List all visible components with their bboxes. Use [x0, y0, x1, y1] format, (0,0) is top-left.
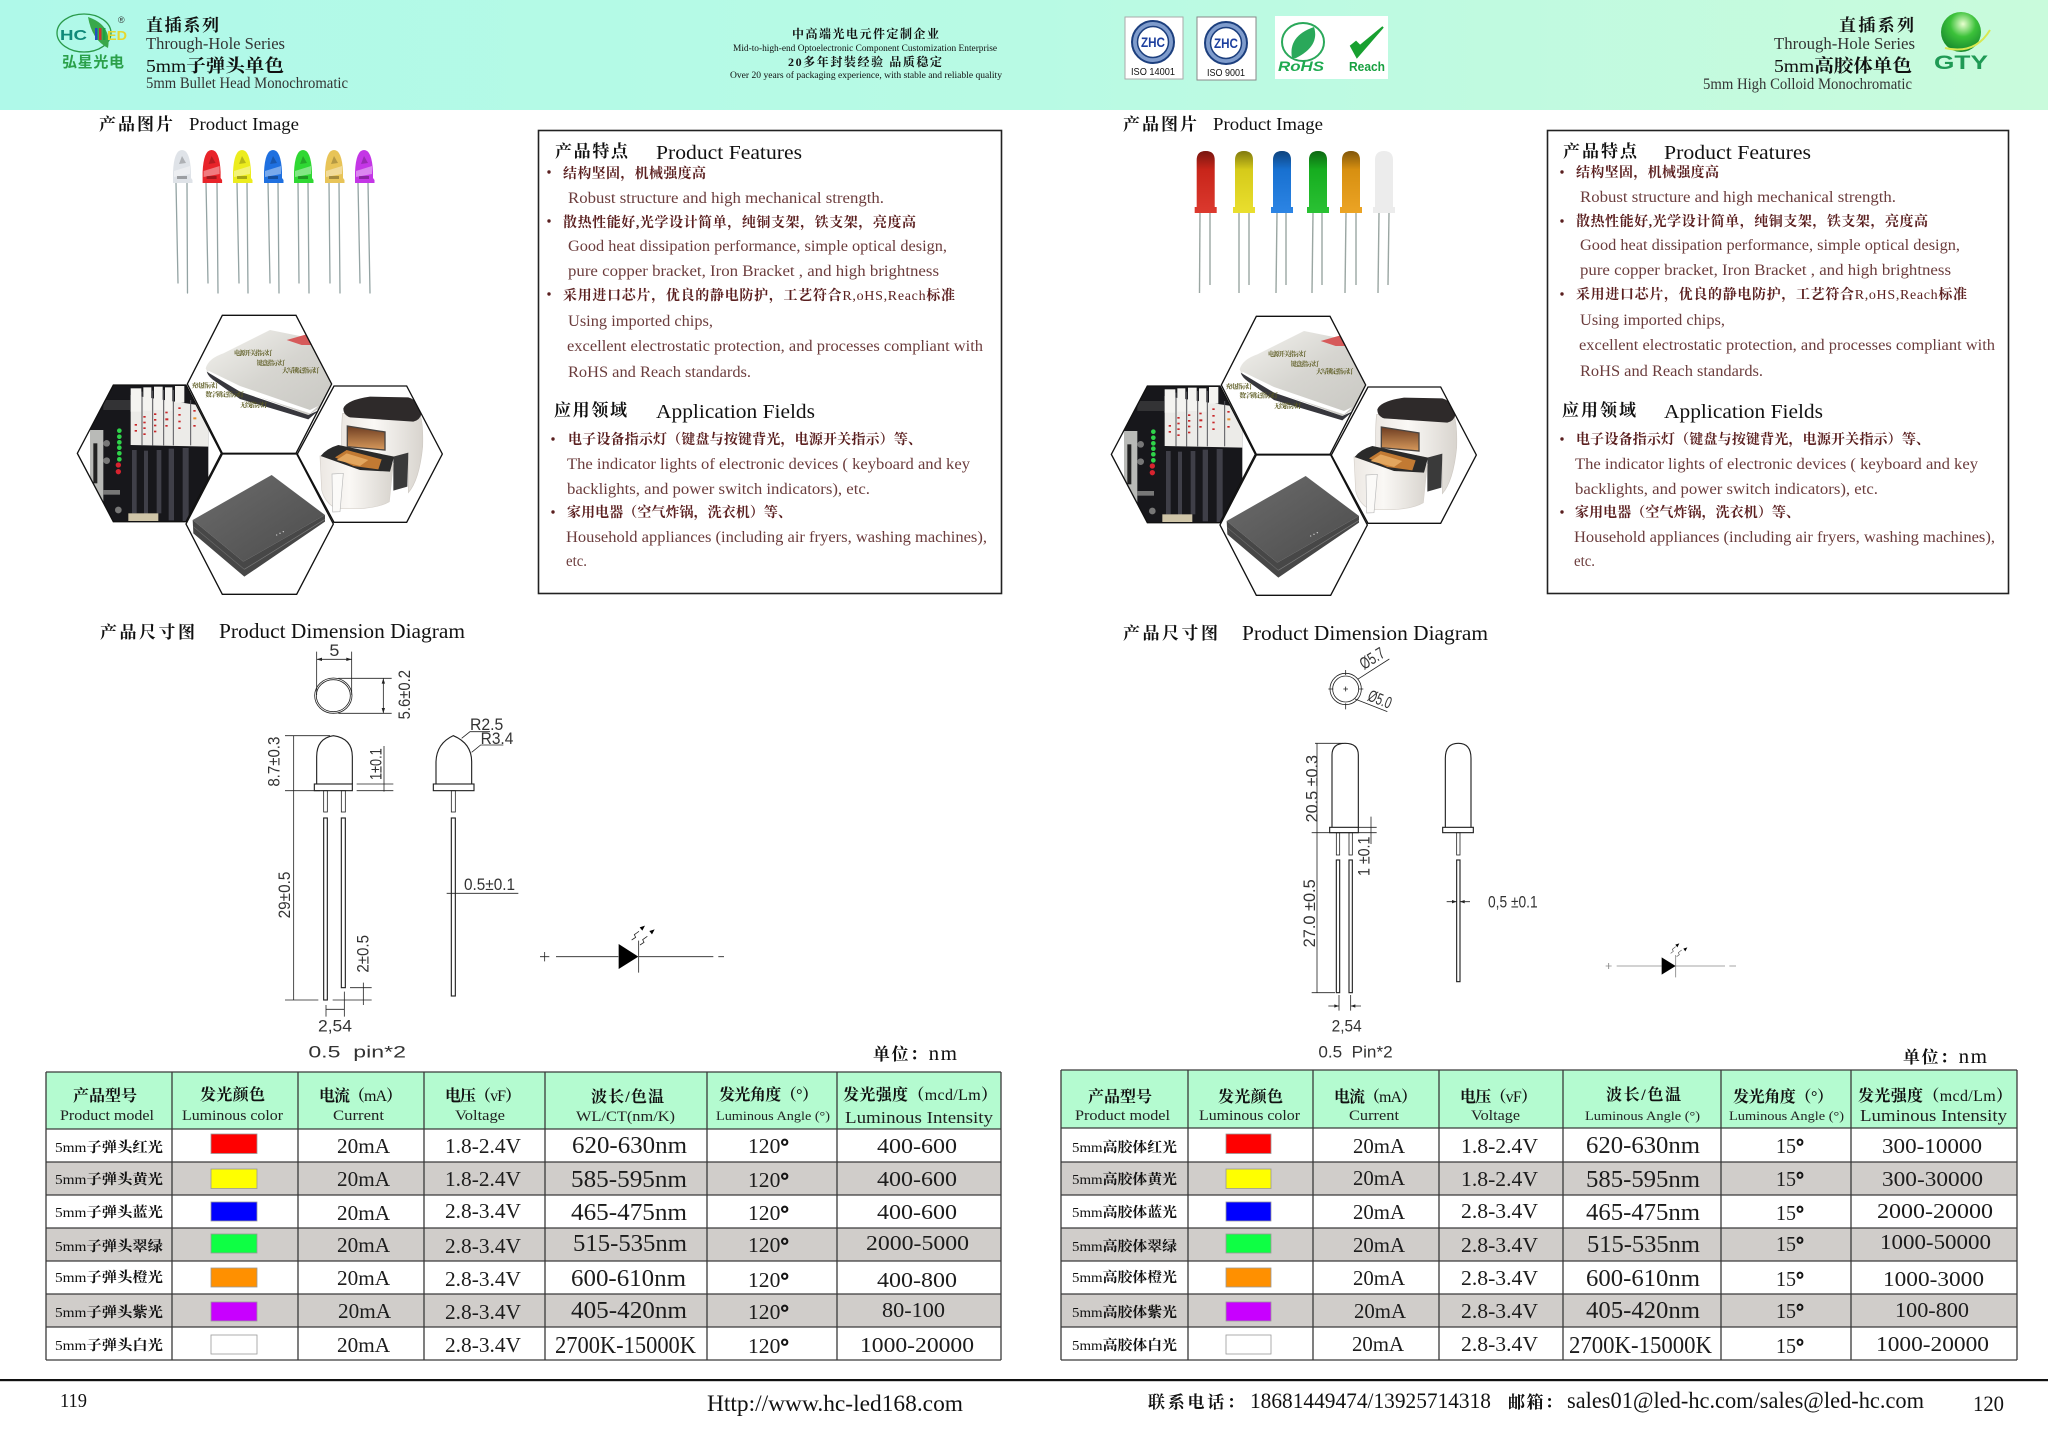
row: orange: 400-800	[877, 1268, 957, 1292]
application list	[1560, 431, 1995, 570]
row: red	[55, 1133, 957, 1159]
row: blue: 20mA	[1353, 1200, 1406, 1224]
row: red: 1.8-2.4V	[1461, 1134, 1538, 1158]
dimension drawing: left 5mm bullet LED: 8.7±0.3	[264, 737, 283, 787]
row: red: 15°	[1776, 1134, 1804, 1158]
row: yellow	[1072, 1166, 1983, 1193]
row: purple: 100-800	[1895, 1298, 1969, 1322]
row: purple: 5mm高胶体紫光	[1072, 1304, 1177, 1321]
row: white: 20mA	[337, 1333, 391, 1357]
row: orange: 600-610nm	[1586, 1266, 1700, 1292]
badge: RoHS and Reach: Reach	[1349, 59, 1385, 74]
dimension drawing: left 5mm bullet LED: 0.5 pin*2	[308, 1043, 406, 1062]
row: white: 15°	[1776, 1334, 1804, 1358]
row: orange: 1000-3000	[1883, 1267, 1984, 1291]
dimension drawing: right high colloid LED: 1 ±0.1	[1354, 837, 1373, 876]
heading: application fields: 应用领域	[554, 400, 627, 420]
row: white: 5mm子弹头白光	[55, 1337, 163, 1354]
application list: The indicator lights of electronic devices ( keyboard and key	[1575, 456, 1978, 473]
table header row: Product model	[60, 1108, 154, 1124]
feature list: Robust structure and high mechanical strength.	[568, 190, 884, 207]
feature list: 散热性能好,光学设计简单，纯铜支架，铁支架，亮度高	[563, 214, 916, 231]
table header row: Luminous Angle (°)	[1585, 1108, 1700, 1123]
panel: right features and applications	[1548, 130, 2008, 594]
logo: HC LED	[57, 14, 127, 71]
header band	[0, 0, 2048, 110]
application photos: left hexagons: 数字锁定指示灯	[205, 390, 244, 399]
row: red: 20mA	[337, 1134, 391, 1158]
footer: right page number: 120	[1973, 1391, 2004, 1416]
heading: application fields	[1562, 400, 1823, 423]
table: right high colloid LED specifications	[1061, 1070, 2017, 1360]
heading: application fields	[554, 400, 815, 423]
row: white: 2700K-15000K	[555, 1333, 697, 1359]
row: white: 2700K-15000K	[1569, 1333, 1713, 1359]
application photos: right hexagons: 电源开关指示灯	[1268, 349, 1307, 358]
row: white: 1000-20000	[1876, 1332, 1989, 1356]
row: yellow: 120°	[748, 1168, 789, 1192]
dimension drawing: right high colloid LED: 0,5 ±0.1	[1488, 892, 1538, 911]
badge: RoHS and Reach	[1275, 16, 1388, 79]
row: orange: 2.8-3.4V	[445, 1267, 521, 1291]
feature list: Good heat dissipation performance, simple optical design,	[568, 238, 947, 255]
application list: 家用电器（空气炸锅，洗衣机）等、	[567, 504, 792, 521]
table header row: 电压（vF）	[1460, 1088, 1537, 1106]
left page title: Through-Hole Series	[146, 34, 285, 53]
row: red: 400-600	[877, 1134, 957, 1158]
row: emerald green: 5mm子弹头翠绿	[55, 1238, 163, 1255]
dimension drawing: left 5mm bullet LED	[264, 641, 724, 1062]
row: red: 1.8-2.4V	[445, 1134, 521, 1158]
logo: HC LED: 弘星光电	[62, 54, 124, 71]
row: orange: 15°	[1776, 1267, 1804, 1291]
colour swatches	[1226, 1134, 1271, 1354]
row: blue	[1072, 1199, 1993, 1226]
row: purple: 15°	[1776, 1299, 1804, 1323]
table header row: Voltage	[455, 1108, 505, 1124]
row: blue: 465-475nm	[571, 1200, 687, 1226]
heading: right dimension diagram: Product Dimension Diagram	[1242, 621, 1488, 645]
application list: Household appliances (including air fryers, washing machines),	[566, 529, 987, 546]
row: orange: 120°	[748, 1268, 789, 1292]
application photos: right hexagons	[1111, 316, 1476, 595]
table header row: WL/CT(nm/K)	[576, 1109, 675, 1125]
row: white: 2.8-3.4V	[445, 1333, 521, 1357]
row: emerald green	[55, 1231, 969, 1258]
row: yellow: 5mm高胶体黄光	[1072, 1171, 1177, 1188]
logo: HC LED: HC	[60, 27, 87, 44]
centre slogan: 20多年封装经验 品质稳定	[788, 54, 942, 69]
table header row: 电流（mA）	[319, 1086, 402, 1105]
row: red: 300-10000	[1882, 1134, 1982, 1158]
table header row: Luminous color	[1199, 1108, 1300, 1124]
colour swatches	[211, 1134, 257, 1354]
dimension drawing: right high colloid LED: 2,54	[1332, 1017, 1362, 1036]
dimension drawing: left 5mm bullet LED: R2.5	[470, 715, 503, 734]
row: blue: 5mm高胶体蓝光	[1072, 1204, 1177, 1221]
product photo: right high colloid LEDs	[1195, 151, 1395, 293]
row: orange: 20mA	[337, 1266, 391, 1290]
row: emerald green: 20mA	[337, 1233, 391, 1257]
badge: ISO 14001: ZHC	[1141, 34, 1165, 50]
badge: ISO 9001	[1197, 17, 1256, 80]
row: yellow: 585-595nm	[1586, 1167, 1700, 1193]
table header row: Luminous color	[182, 1108, 283, 1124]
heading: left dimension diagram: Product Dimension Diagram	[219, 619, 465, 643]
left page title	[146, 15, 348, 92]
row: red: 20mA	[1353, 1134, 1406, 1158]
table header row: Luminous Intensity	[1860, 1106, 2008, 1125]
row: white: 20mA	[1352, 1332, 1405, 1356]
heading: right product image: Product Image	[1213, 114, 1323, 134]
dimension drawing: left 5mm bullet LED: 2±0.5	[353, 935, 372, 973]
feature list: Using imported chips,	[1580, 312, 1725, 329]
row: orange: 2.8-3.4V	[1461, 1266, 1538, 1290]
heading: product features: Product Features	[656, 142, 802, 164]
table header row: Current	[333, 1108, 385, 1124]
right page title: 直插系列	[1839, 15, 1914, 35]
dimension drawing: right high colloid LED: 20.5 ±0.3	[1302, 755, 1321, 822]
application photos: right hexagons: 键盘指示灯	[1291, 359, 1320, 368]
heading: product features: 产品特点	[1563, 141, 1638, 161]
application photos: left hexagons: 键盘指示灯	[257, 358, 286, 367]
application list: 电子设备指示灯（键盘与按键背光，电源开关指示）等、	[568, 431, 922, 448]
dimension drawing: right high colloid LED	[1300, 644, 1736, 1061]
application photos: right hexagons: 大写锁定指示灯	[1316, 366, 1354, 375]
footer: left page number: 119	[60, 1390, 87, 1412]
dimension drawing: right high colloid LED: Ø5.0	[1365, 686, 1395, 713]
heading: left product image	[99, 114, 299, 134]
application list: backlights, and power switch indicators), etc.	[1575, 481, 1878, 498]
table header row: 产品型号	[73, 1087, 137, 1105]
heading: right dimension diagram	[1123, 621, 1488, 645]
application list: Household appliances (including air fryers, washing machines),	[1574, 529, 1995, 546]
row: purple	[55, 1298, 945, 1324]
feature list: RoHS and Reach standards.	[1580, 363, 1763, 380]
row: emerald green: 2.8-3.4V	[445, 1234, 521, 1258]
application list: etc.	[1574, 553, 1595, 570]
dimension drawing: left 5mm bullet LED: R3.4	[481, 729, 513, 748]
row: white	[55, 1333, 974, 1359]
right page title	[1703, 15, 1915, 93]
logo: HC LED: ®	[118, 15, 125, 25]
table header row: Product model	[1075, 1108, 1170, 1124]
feature list	[1560, 164, 1995, 380]
feature list: Robust structure and high mechanical strength.	[1580, 189, 1896, 206]
row: yellow: 1.8-2.4V	[445, 1167, 521, 1191]
application photos: right hexagons: 数字锁定指示灯	[1239, 391, 1278, 400]
row: emerald green: 15°	[1776, 1232, 1804, 1256]
row: emerald green: 5mm高胶体翠绿	[1072, 1238, 1177, 1255]
centre slogan: Over 20 years of packaging experience, with stable and reliable quality	[730, 70, 1003, 80]
row: emerald green: 2.8-3.4V	[1461, 1233, 1538, 1257]
table header row: Luminous Angle (°)	[716, 1108, 830, 1123]
row: orange: 600-610nm	[571, 1266, 686, 1292]
row: purple: 2.8-3.4V	[1461, 1299, 1538, 1323]
heading: right product image: 产品图片	[1123, 114, 1197, 134]
dimension drawing: left 5mm bullet LED: 5	[329, 641, 339, 660]
row: emerald green: 515-535nm	[573, 1231, 687, 1257]
table header row	[60, 1085, 997, 1127]
table header row: 波长/色温	[1606, 1085, 1681, 1104]
row: blue: 120°	[748, 1201, 789, 1225]
dimension drawing: left 5mm bullet LED: 0.5±0.1	[464, 875, 515, 894]
heading: application fields: Application Fields	[1664, 401, 1823, 423]
row: emerald green: 20mA	[1353, 1233, 1406, 1257]
row: purple: 405-420nm	[571, 1298, 687, 1324]
heading: application fields: Application Fields	[656, 401, 815, 423]
feature list: Good heat dissipation performance, simple optical design,	[1580, 237, 1960, 254]
row: blue: 400-600	[877, 1200, 957, 1224]
row: red: 5mm子弹头红光	[55, 1139, 163, 1156]
left page title: 5mm Bullet Head Monochromatic	[146, 75, 348, 92]
row: yellow: 20mA	[1353, 1166, 1406, 1190]
application photos: left hexagons	[77, 315, 442, 594]
feature list: excellent electrostatic protection, and processes compliant with	[1579, 337, 1995, 354]
feature list: 结构坚固，机械强度高	[1576, 164, 1719, 181]
logo: GTY	[1934, 12, 1990, 74]
heading: product features: 产品特点	[555, 141, 629, 161]
table header row	[1075, 1085, 2012, 1125]
feature list: RoHS and Reach standards.	[568, 364, 751, 381]
row: blue: 2.8-3.4V	[445, 1199, 521, 1223]
heading: left dimension diagram	[100, 619, 465, 643]
row: white: 2.8-3.4V	[1461, 1332, 1538, 1356]
row: blue: 5mm子弹头蓝光	[55, 1204, 163, 1221]
row: emerald green: 1000-50000	[1880, 1230, 1991, 1254]
row: purple	[1072, 1298, 1969, 1324]
row: blue: 2.8-3.4V	[1461, 1199, 1538, 1223]
feature list	[547, 165, 983, 381]
row: purple: 5mm子弹头紫光	[55, 1304, 163, 1321]
application photos: left hexagons: 充电指示灯	[192, 381, 219, 390]
row: yellow: 15°	[1776, 1167, 1804, 1191]
product photo: left bullet LEDs	[173, 150, 374, 293]
row: red: 620-630nm	[1586, 1133, 1700, 1159]
feature list: 采用进口芯片，优良的静电防护，工艺符合R,oHS,Reach标准	[563, 287, 955, 304]
centre slogan: Mid-to-high-end Optoelectronic Component Customization Enterprise	[733, 43, 997, 53]
row: red: 620-630nm	[572, 1133, 687, 1159]
heading: left dimension diagram: 产品尺寸图	[100, 622, 195, 642]
centre slogan: 中高端光电元件定制企业	[792, 26, 939, 41]
application list: 家用电器（空气炸锅，洗衣机）等、	[1575, 504, 1800, 521]
table: left bullet LED specifications	[46, 1072, 1001, 1360]
footer: contact details	[1148, 1388, 1924, 1413]
application list	[551, 431, 987, 570]
dimension drawing: right high colloid LED: 0.5 Pin*2	[1318, 1042, 1393, 1061]
row: purple: 120°	[748, 1300, 789, 1324]
table header row: Luminous Angle (°)	[1729, 1108, 1844, 1123]
heading: product features: Product Features	[1664, 142, 1811, 164]
panel: left features and applications	[538, 130, 1002, 594]
icon: LED symbol	[1606, 943, 1736, 977]
row: purple: 80-100	[882, 1298, 945, 1322]
row: orange: 20mA	[1353, 1266, 1406, 1290]
application photos: right hexagons: 无线指示灯	[1274, 401, 1302, 410]
row: orange	[1072, 1266, 1984, 1292]
row: yellow	[55, 1167, 957, 1193]
dimension drawing: left 5mm bullet LED: 2,54	[318, 1017, 352, 1036]
table header row: Luminous Intensity	[845, 1108, 994, 1127]
application photos: left hexagons: 大写锁定指示灯	[282, 365, 320, 374]
table header row: 发光角度（°）	[719, 1085, 818, 1104]
row: blue: 2000-20000	[1877, 1199, 1993, 1223]
row: yellow: 400-600	[877, 1167, 957, 1191]
table header row: 波长/色温	[591, 1087, 664, 1106]
right page title: Through-Hole Series	[1774, 34, 1915, 53]
logo: HC LED: ED	[107, 28, 127, 43]
row: orange	[55, 1266, 957, 1292]
badge: ISO 9001: ZHC	[1214, 35, 1238, 51]
heading: product features	[1563, 141, 1811, 164]
row: red: 120°	[748, 1134, 789, 1158]
application photos: left hexagons: 电源开关指示灯	[234, 348, 273, 357]
row: orange: 5mm高胶体橙光	[1072, 1269, 1177, 1286]
table header row: 发光颜色	[200, 1085, 265, 1104]
row: purple: 20mA	[338, 1299, 392, 1323]
table header row: 发光角度（°）	[1733, 1087, 1833, 1106]
row: purple: 405-420nm	[1586, 1298, 1700, 1324]
row: purple: 2.8-3.4V	[445, 1300, 521, 1324]
table header row: Voltage	[1471, 1108, 1520, 1124]
logo: GTY: GTY	[1934, 53, 1988, 74]
row: yellow: 1.8-2.4V	[1461, 1167, 1538, 1191]
footer: contact details: 联系电话：	[1148, 1392, 1244, 1412]
badge: ISO 14001: ISO 14001	[1131, 67, 1175, 78]
footer: contact details: sales01@led-hc.com/sales@led-hc.com	[1567, 1388, 1924, 1413]
row: emerald green: 2000-5000	[866, 1231, 969, 1255]
heading: product features	[555, 141, 802, 164]
feature list: Using imported chips,	[568, 313, 713, 330]
row: white: 1000-20000	[860, 1333, 974, 1357]
application photos: left hexagons: 无线指示灯	[240, 400, 268, 409]
heading: left product image: Product Image	[189, 114, 299, 134]
feature list: 采用进口芯片，优良的静电防护，工艺符合R,oHS,Reach标准	[1576, 286, 1967, 303]
table header row: 发光强度（mcd/Lm）	[843, 1085, 997, 1104]
row: orange: 5mm子弹头橙光	[55, 1269, 163, 1286]
feature list: 散热性能好,光学设计简单，纯铜支架，铁支架，亮度高	[1576, 213, 1928, 230]
row: yellow: 300-30000	[1882, 1167, 1983, 1191]
row: emerald green	[1072, 1230, 1991, 1258]
dimension drawing: right high colloid LED: Ø5.7	[1356, 644, 1388, 673]
feature list: 结构坚固，机械强度高	[563, 165, 706, 182]
heading: right dimension diagram: 产品尺寸图	[1123, 623, 1218, 643]
badge: ISO 9001: ISO 9001	[1207, 68, 1245, 79]
table header row: 电压（vF）	[445, 1087, 521, 1105]
row: emerald green: 515-535nm	[1587, 1232, 1700, 1258]
table header row: Current	[1349, 1108, 1400, 1124]
table header row: 发光颜色	[1218, 1087, 1283, 1106]
footer: contact details: 邮箱：	[1508, 1393, 1562, 1412]
row: white: 120°	[748, 1334, 789, 1358]
dimension drawing: right high colloid LED: 27.0 ±0.5	[1300, 879, 1319, 947]
row: blue: 465-475nm	[1586, 1200, 1700, 1226]
row: blue: 20mA	[337, 1201, 391, 1225]
heading: left product image: 产品图片	[99, 114, 173, 134]
row: red	[1072, 1133, 1982, 1159]
heading: right product image	[1123, 114, 1323, 134]
centre slogan	[730, 26, 1003, 80]
row: blue	[55, 1199, 957, 1226]
table header row: 电流（mA）	[1334, 1087, 1417, 1106]
row: blue: 15°	[1776, 1201, 1804, 1225]
heading: application fields: 应用领域	[1562, 400, 1636, 420]
row: white: 5mm高胶体白光	[1072, 1337, 1177, 1354]
row: yellow: 20mA	[337, 1167, 391, 1191]
footer rule	[0, 1379, 2048, 1381]
row: red: 5mm高胶体红光	[1072, 1139, 1177, 1156]
footer: website: Http://www.hc-led168.com	[707, 1391, 963, 1416]
badge: ISO 14001	[1125, 17, 1183, 79]
feature list: pure copper bracket, Iron Bracket , and high brightness	[568, 263, 939, 280]
application photos: right hexagons: 充电指示灯	[1226, 382, 1253, 391]
dimension drawing: left 5mm bullet LED: 29±0.5	[275, 872, 294, 918]
left page title: 直插系列	[146, 15, 219, 35]
unit label left: 单位：nm	[873, 1041, 957, 1065]
unit label right: 单位：nm	[1903, 1044, 1987, 1068]
left page title: 5mm子弹头单色	[146, 55, 284, 76]
table header row: 发光强度（mcd/Lm）	[1858, 1086, 2012, 1105]
feature list: excellent electrostatic protection, and processes compliant with	[567, 338, 983, 355]
dimension drawing: left 5mm bullet LED: 5.6±0.2	[395, 670, 414, 719]
feature list: pure copper bracket, Iron Bracket , and high brightness	[1580, 262, 1951, 279]
row: purple: 20mA	[1354, 1299, 1407, 1323]
application list: 电子设备指示灯（键盘与按键背光，电源开关指示）等、	[1576, 431, 1930, 448]
row: yellow: 585-595nm	[571, 1167, 687, 1193]
row: white	[1072, 1332, 1989, 1359]
right page title: 5mm高胶体单色	[1774, 55, 1912, 76]
dimension drawing: left 5mm bullet LED: 1±0.1	[367, 748, 386, 780]
icon: LED symbol	[540, 926, 724, 973]
table header row: 产品型号	[1088, 1088, 1152, 1106]
application list: The indicator lights of electronic devices ( keyboard and key	[567, 456, 970, 473]
footer: contact details: 18681449474/13925714318	[1250, 1388, 1491, 1413]
application list: backlights, and power switch indicators), etc.	[567, 481, 870, 498]
right page title: 5mm High Colloid Monochromatic	[1703, 76, 1912, 93]
row: emerald green: 120°	[748, 1233, 789, 1257]
application list: etc.	[566, 553, 587, 570]
row: yellow: 5mm子弹头黄光	[55, 1171, 163, 1188]
badge: RoHS and Reach: RoHS	[1278, 58, 1325, 74]
